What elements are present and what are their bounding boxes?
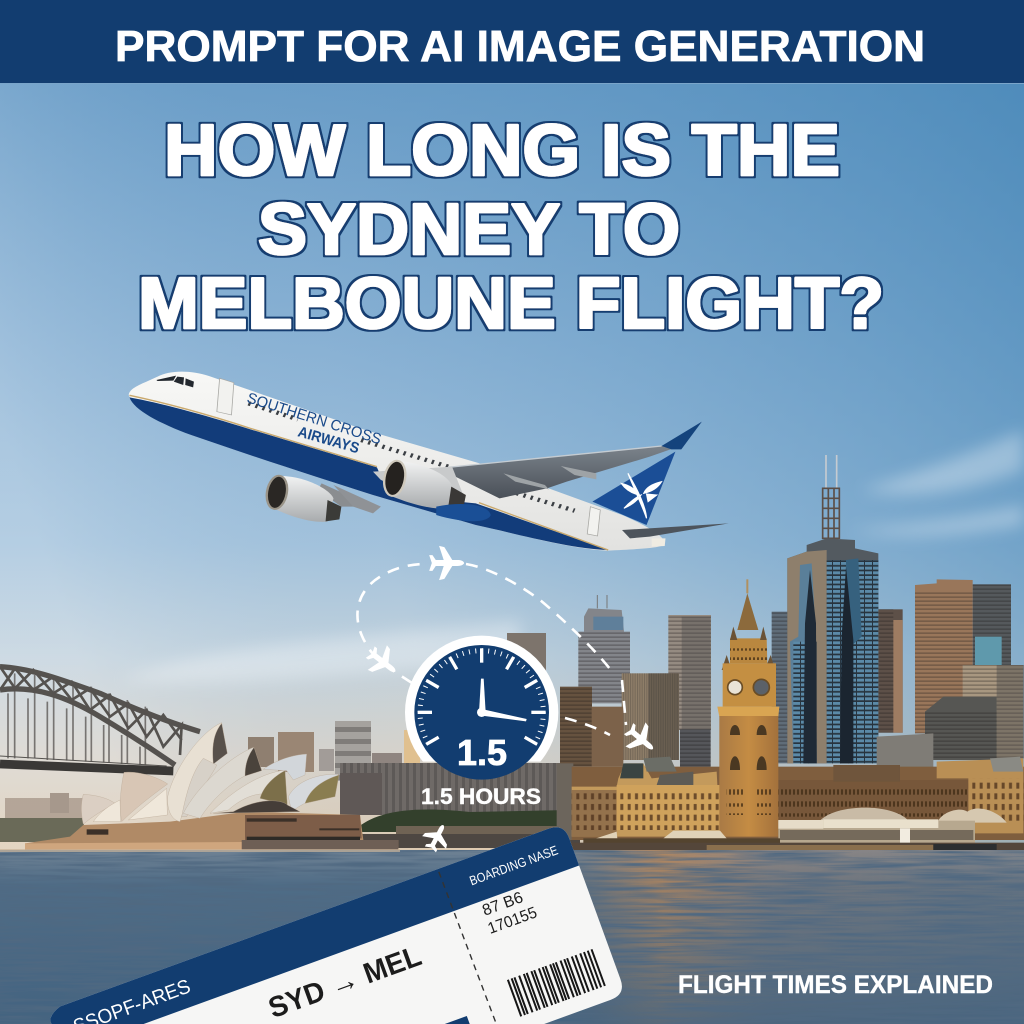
- icon: plane top: [429, 546, 464, 580]
- opera house sails: [81, 723, 339, 824]
- header banner: [0, 0, 1024, 83]
- far engine: [264, 475, 373, 522]
- fuselage: [129, 372, 665, 551]
- clock badge: [405, 636, 558, 789]
- near engine: [373, 460, 466, 509]
- heritage waterfront building: [557, 757, 1024, 840]
- major ticks: [418, 648, 546, 744]
- belly livery: [129, 397, 608, 550]
- perforation: [439, 871, 496, 1024]
- Sydney Opera House: [25, 723, 398, 852]
- title: HOW LONG IS THE: [164, 111, 840, 191]
- title: MELBOUNE FLIGHT?: [138, 264, 884, 344]
- footer caption: FLIGHT TIMES EXPLAINED: [678, 971, 993, 999]
- wing root fairing: [436, 504, 491, 521]
- mid towers: [560, 595, 711, 769]
- clock ring: [405, 636, 558, 762]
- main glass tower: [772, 455, 903, 763]
- doors: [217, 378, 600, 536]
- icon: plane small: [418, 819, 455, 856]
- clock tower: [717, 579, 779, 837]
- sky background: [0, 84, 1024, 864]
- boarding pass: [47, 823, 626, 1024]
- barcode: [508, 949, 605, 1016]
- title: SYDNEY TO: [258, 190, 680, 270]
- right towers: [877, 579, 1024, 770]
- airline name line two: AIRWAYS: [296, 424, 361, 457]
- navy field: [445, 1016, 470, 1024]
- horizontal stabiliser: [622, 523, 729, 538]
- icon: plane right: [619, 717, 663, 761]
- opera house base: [25, 812, 398, 851]
- vertical tail: [592, 452, 675, 525]
- gold cheatline: [129, 395, 608, 550]
- title: [138, 111, 884, 344]
- cockpit windows: [156, 376, 194, 387]
- duration label: 1.5 HOURS: [421, 784, 541, 809]
- wing: [448, 446, 673, 498]
- pass label: BOARDING NASE: [467, 842, 560, 888]
- seat code: 87 B6: [480, 889, 526, 920]
- winglet: [662, 422, 702, 449]
- harbour water: [0, 849, 1024, 1024]
- clock hands: [477, 679, 527, 721]
- tail cone: [652, 538, 666, 547]
- ticket number: 170155: [486, 904, 540, 938]
- Melbourne skyline: [557, 455, 1024, 856]
- icon: plane left: [361, 640, 405, 684]
- minor ticks: [418, 648, 546, 746]
- clock face: [414, 645, 549, 780]
- dashed flight path: [357, 564, 626, 735]
- clock number: 1.5: [457, 732, 507, 773]
- ticket header band: [47, 823, 579, 1024]
- header banner: PROMPT FOR AI IMAGE GENERATION: [115, 22, 925, 71]
- quay: [557, 843, 1024, 856]
- Harbour Bridge: [0, 667, 200, 771]
- Sydney skyline buildings: [0, 633, 580, 848]
- route: SYD → MEL: [264, 940, 426, 1024]
- cabin windows: [248, 403, 575, 511]
- waterfront pavilions: [583, 808, 1007, 845]
- airline name: SOUTHERN CROSS: [245, 390, 383, 448]
- airliner: [129, 372, 729, 551]
- ticket body: [47, 823, 626, 1024]
